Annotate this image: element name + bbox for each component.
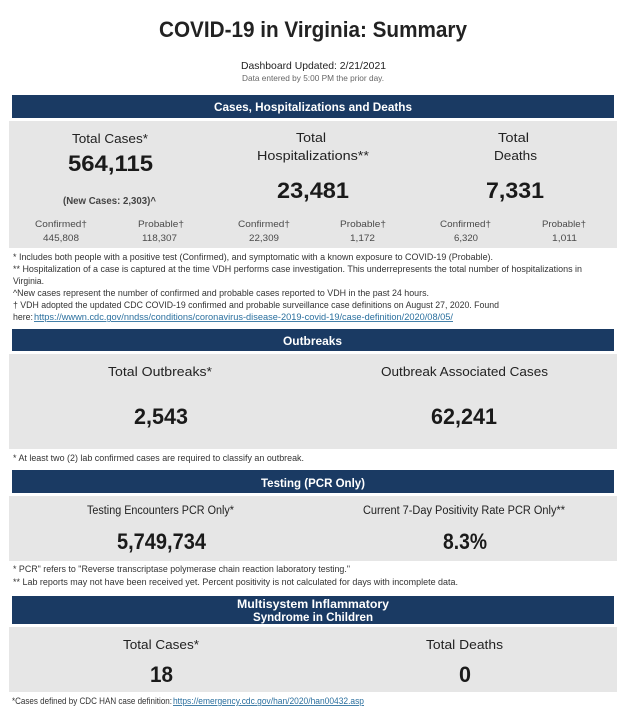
footnote: MIS-C: [12, 696, 364, 706]
banner: outbreaks: [12, 329, 614, 351]
outbreak associated cases: [381, 364, 549, 429]
footnotes: cases: Virginia.: [13, 276, 44, 286]
total deaths: 1,011: [552, 233, 577, 244]
positivity rate: [363, 505, 565, 554]
total cases: [35, 131, 184, 244]
banner: testing: [12, 470, 614, 493]
footnotes: cases: here:: [13, 312, 33, 322]
banner: multisystem inflammatory syndrome in children: [12, 596, 614, 624]
dashboard update text: Data entered by 5:00 PM the prior day.: [242, 73, 384, 83]
total deaths: Total: [498, 130, 529, 145]
banner: multisystem inflammatory syndrome in children: Multisystem Inflammatory: [237, 597, 389, 611]
footnotes: testing: [13, 564, 458, 587]
footnote: MIS-C: *Cases defined by CDC HAN case definition:: [12, 696, 172, 706]
total outbreaks: Total Outbreaks*: [108, 364, 212, 379]
panel: testing: [9, 496, 617, 561]
positivity rate: Current 7-Day Positivity Rate PCR Only**: [363, 505, 565, 517]
footnotes: testing: ** Lab reports may not have been received yet. Percent positivity is not calculated for days with incomplete data.: [13, 577, 458, 587]
total outbreaks: [108, 364, 212, 429]
total deaths: [440, 130, 586, 244]
panel: outbreaks: [9, 354, 617, 449]
total cases: 118,307: [142, 233, 177, 244]
dashboard update text: [241, 60, 386, 83]
MIS-C total cases: 18: [150, 662, 173, 687]
footnote: MIS-C: https://emergency.cdc.gov/han/2020/han00432.asp: [173, 696, 364, 706]
total hospitalizations: 1,172: [350, 233, 375, 244]
total cases: Total Cases*: [72, 131, 148, 146]
banner: outbreaks: Outbreaks: [283, 334, 342, 348]
MIS-C total cases: Total Cases*: [123, 637, 199, 652]
outbreak associated cases: 62,241: [431, 404, 497, 429]
footnotes: cases: ** Hospitalization of a case is captured at the time VDH performs case investigation. This underrepresents the total number of hospitalizations in: [13, 264, 582, 274]
total cases: 564,115: [68, 151, 153, 176]
total hospitalizations: 22,309: [249, 233, 279, 244]
testing encounters: Testing Encounters PCR Only*: [87, 505, 234, 517]
total deaths: 7,331: [486, 178, 544, 203]
testing encounters: 5,749,734: [117, 529, 207, 554]
positivity rate: 8.3%: [443, 529, 487, 554]
footnotes: cases: [13, 252, 582, 322]
MIS-C total deaths: [426, 637, 504, 687]
banner: cases, hospitalizations and deaths: [12, 95, 614, 118]
total hospitalizations: [238, 130, 386, 244]
panel: multisystem inflammatory syndrome in children: [9, 627, 617, 692]
banner: multisystem inflammatory syndrome in children: Syndrome in Children: [253, 610, 373, 624]
total deaths: 6,320: [454, 233, 478, 244]
total deaths: Probable†: [542, 219, 586, 230]
total cases: Confirmed†: [35, 219, 87, 230]
dashboard update text: Dashboard Updated: 2/21/2021: [241, 60, 386, 72]
total deaths: Confirmed†: [440, 219, 491, 230]
MIS-C total deaths: 0: [459, 662, 471, 687]
total cases: (New Cases: 2,303)^: [63, 196, 156, 207]
footnotes: cases: https://wwwn.cdc.gov/nndss/conditions/coronavirus-disease-2019-covid-19/case-definition/2020/08/05/: [34, 312, 454, 322]
footnotes: cases: ^New cases represent the number of confirmed and probable cases reported to VDH in the past 24 hours.: [13, 288, 429, 298]
total hospitalizations: Confirmed†: [238, 219, 290, 230]
banner: cases, hospitalizations and deaths: Cases, Hospitalizations and Deaths: [214, 100, 412, 114]
total cases: 445,808: [43, 233, 79, 244]
total outbreaks: 2,543: [134, 404, 188, 429]
MIS-C total deaths: Total Deaths: [426, 637, 504, 652]
title: COVID-19 in Virginia: Summary: [159, 17, 468, 42]
total hospitalizations: Hospitalizations**: [257, 148, 369, 163]
MIS-C total cases: [123, 637, 199, 687]
total deaths: Deaths: [494, 148, 538, 163]
footnotes: cases: * Includes both people with a positive test (Confirmed), and symptomatic with a known exposure to COVID-19 (Probable).: [13, 252, 493, 262]
total hospitalizations: Total: [296, 130, 326, 145]
outbreak associated cases: Outbreak Associated Cases: [381, 364, 549, 379]
footnote: outbreaks: * At least two (2) lab confirmed cases are required to classify an outbreak.: [13, 453, 304, 463]
total hospitalizations: Probable†: [340, 219, 386, 230]
footnotes: cases: † VDH adopted the updated CDC COVID-19 confirmed and probable surveillance case definitions on August 27, 2020. Found: [13, 300, 499, 310]
total cases: Probable†: [138, 219, 184, 230]
testing encounters: [87, 505, 234, 554]
banner: testing: Testing (PCR Only): [261, 476, 365, 490]
footnotes: testing: * PCR" refers to "Reverse transcriptase polymerase chain reaction laboratory testing.": [13, 564, 350, 574]
panel: cases, hospitalizations and deaths: [9, 121, 617, 248]
total hospitalizations: 23,481: [277, 178, 349, 203]
